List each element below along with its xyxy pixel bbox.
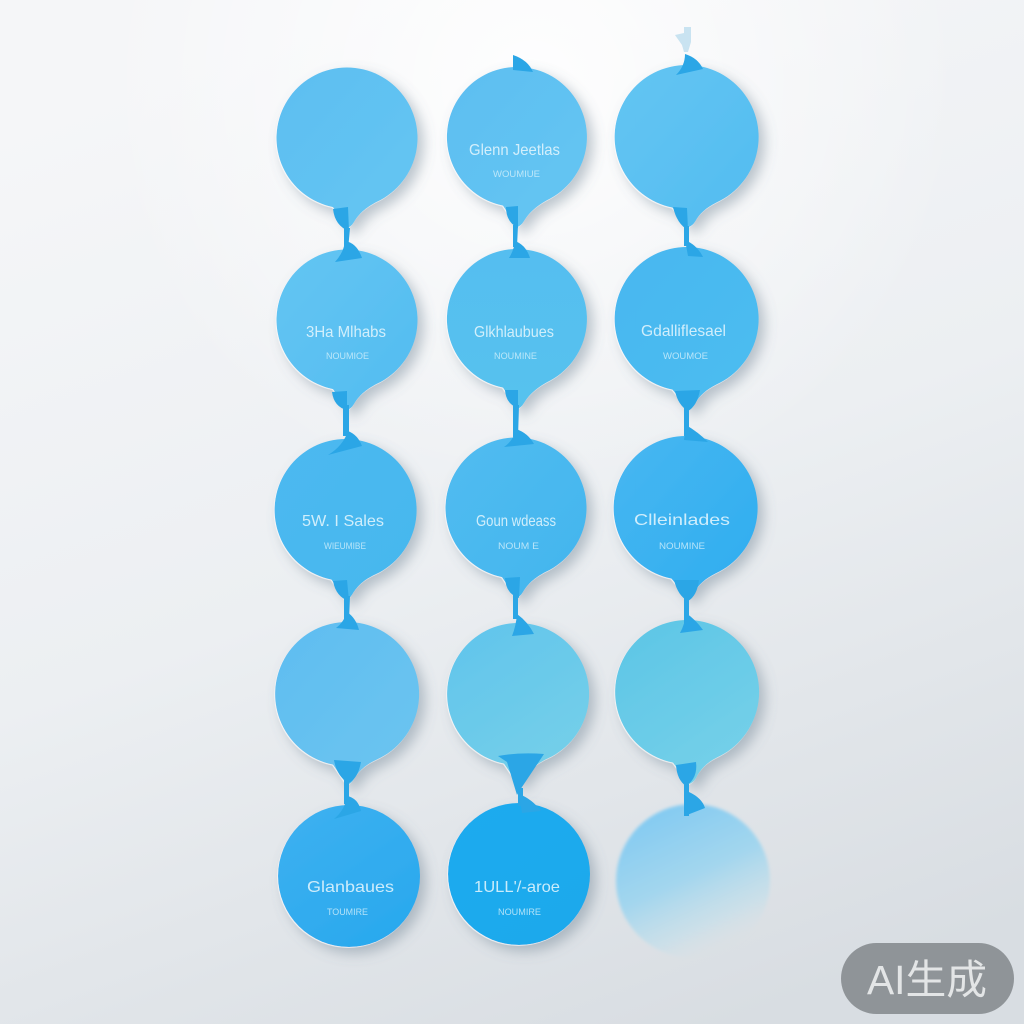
label 2-3: WOUMOE	[663, 351, 708, 361]
label 2-3	[641, 323, 726, 361]
label 3-2: Goun wdeass	[476, 513, 556, 530]
label 5-2: NOUMIRE	[498, 907, 541, 917]
circle 2-2	[447, 249, 587, 409]
connector 3-1	[333, 580, 359, 630]
flag top 1-3	[675, 27, 691, 52]
badge: AI generated: AI生成	[867, 957, 987, 1003]
label 5-2: 1ULL'/-aroe	[474, 879, 560, 896]
label 5-1: Glanbaues	[307, 879, 394, 896]
circle 4-1	[275, 622, 419, 785]
connector 4-3	[676, 762, 705, 816]
connector 2-1	[328, 391, 362, 455]
label 2-2: NOUMINE	[494, 351, 537, 361]
label 2-1: NOUMIOE	[326, 351, 369, 361]
connector 2-3	[675, 390, 708, 442]
label 3-3: NOUMINE	[659, 541, 705, 551]
circle 3-1	[275, 439, 417, 600]
circle 4-2	[447, 623, 589, 784]
label 2-3: Gdalliflesael	[641, 323, 726, 340]
label 3-3: Clleinlades	[634, 512, 730, 529]
tag top 1-2	[513, 55, 533, 72]
label 1-2	[469, 142, 560, 179]
panel: column 1 circles	[275, 68, 420, 947]
circle 3-2	[445, 438, 586, 598]
circle 2-1	[276, 250, 417, 410]
connector 1-2	[506, 206, 530, 258]
circle 3-3	[614, 436, 758, 598]
circle 1-2	[447, 67, 587, 227]
circle 5-2	[448, 803, 590, 945]
label 3-2: NOUM E	[498, 541, 539, 551]
label 3-1	[302, 513, 384, 551]
connector 2-2	[504, 390, 534, 447]
connector 1-1	[333, 207, 362, 262]
label 5-1	[307, 879, 394, 917]
connector 3-2	[505, 577, 534, 636]
connector 3-3	[674, 580, 703, 633]
circle 5-1	[278, 805, 420, 947]
panel: column 2 circles	[445, 55, 590, 945]
circle 5-3 faded	[616, 804, 770, 958]
circle 1-1	[276, 68, 417, 228]
labels: circle text	[302, 142, 730, 917]
label 1-2: WOUMIUE	[493, 169, 540, 179]
label 3-1: 5W. I Sales	[302, 513, 384, 530]
label 3-3	[634, 512, 730, 551]
circle 2-3	[615, 247, 759, 409]
circle 4-3	[615, 620, 759, 784]
connector 1-3	[673, 207, 703, 257]
connector 4-1	[334, 760, 361, 819]
circle 1-3	[615, 65, 759, 227]
label 1-2: Glenn Jeetlas	[469, 142, 560, 159]
label 2-1	[306, 324, 386, 361]
connector 4-2	[498, 753, 544, 813]
label 3-1: WIEUMIBE	[324, 541, 366, 551]
label 2-2: Glkhlaubues	[474, 324, 554, 341]
tag top 1-3	[676, 54, 703, 75]
badge: AI generated	[841, 943, 1014, 1014]
panel: column 3 circles	[614, 27, 770, 958]
label 5-2	[474, 879, 560, 917]
label 3-2	[476, 513, 556, 551]
label 5-1: TOUMIRE	[327, 907, 368, 917]
label 2-2	[474, 324, 554, 361]
label 2-1: 3Ha Mlhabs	[306, 324, 386, 341]
